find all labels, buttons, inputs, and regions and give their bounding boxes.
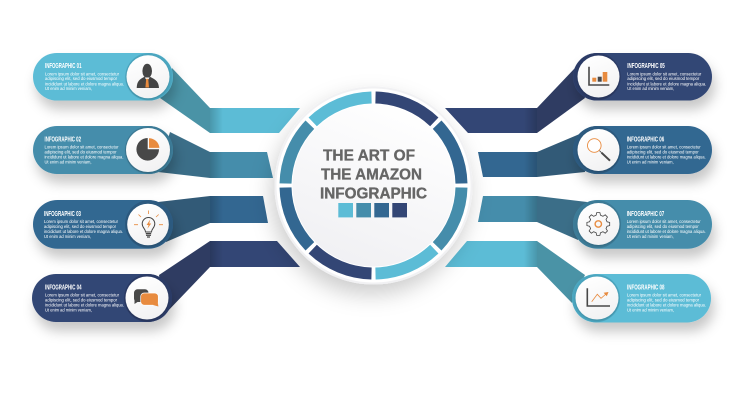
body text 08: incididunt ut labore et dolore magna aliqua. [627,303,706,309]
colour squares [338,203,407,217]
panel: infographic 07 [573,200,712,249]
icon: gear [573,200,621,248]
body text 08: Lorem ipsum dolor sit amet, consectetur [627,293,701,299]
title: THE AMAZON [321,166,422,184]
body text 03 [44,219,123,240]
heading 06: INFOGRAPHIC 06 [627,134,664,144]
body text 01 [45,71,124,92]
body text 05 [627,71,706,92]
body text 02: Ut enim ad minim veniam, [44,160,92,166]
body text 07: Lorem ipsum dolor sit amet, consectetur [627,219,701,225]
body text 04: incididunt ut labore et dolore magna aliqua. [45,303,124,309]
title [320,148,427,202]
body text 01: adipiscing elit, sed do eiusmod tempor [45,76,117,82]
body text 06 [627,144,706,166]
body text 02: incididunt ut labore et dolore magna aliqua. [44,154,124,160]
body text 03: Ut enim ad minim veniam, [44,234,91,240]
body text 07: Ut enim ad minim veniam, [627,234,674,240]
panel: infographic 08 [572,274,711,322]
body text 06: adipiscing elit, sed do eiusmod tempor [627,149,699,155]
connector: infographic 01 [160,68,300,133]
body text 04: Ut enim ad minim veniam, [45,308,92,314]
heading 03: INFOGRAPHIC 03 [44,209,81,218]
icon: line chart [572,274,620,322]
body text 07 [627,219,706,240]
body text 05: Lorem ipsum dolor sit amet, consectetur [627,71,702,77]
body text 01: Lorem ipsum dolor sit amet, consectetur [45,71,119,77]
connector: infographic 04 [159,241,300,314]
panel: infographic 05 [573,53,712,100]
panel: infographic 02 [33,126,173,174]
connector: infographic 07 [478,196,587,240]
icon: person [125,53,173,100]
panel: infographic 06 [573,126,712,174]
body text 08: adipiscing elit, sed do eiusmod tempor [627,297,699,303]
icon: bar chart [573,53,621,100]
body text 06: Ut enim ad minim veniam, [627,160,674,166]
central circle [249,61,498,310]
connector: infographic 06 [478,133,585,177]
heading 04: INFOGRAPHIC 04 [45,282,82,292]
connector: infographic 02 [158,132,273,178]
heading 07: INFOGRAPHIC 07 [627,209,664,218]
body text 07: adipiscing elit, sed do eiusmod tempor [627,224,699,230]
connector: infographic 03 [158,196,268,242]
body text 03: Lorem ipsum dolor sit amet, consectetur [44,219,118,225]
body text 04 [45,293,124,314]
body text 05: Ut enim ad minim veniam, [627,86,674,92]
body text 06: incididunt ut labore et dolore magna aliqua. [627,154,706,160]
body text 04: Lorem ipsum dolor sit amet, consectetur [45,293,119,299]
heading 05: INFOGRAPHIC 05 [627,61,665,70]
connector: infographic 08 [445,241,585,303]
connector: infographic 05 [445,68,585,133]
title: THE ART OF [323,148,415,164]
body text 01: Ut enim ad minim veniam, [45,86,92,92]
body text 08: Ut enim ad minim veniam, [627,308,674,314]
heading 01: INFOGRAPHIC 01 [45,61,82,70]
title: INFOGRAPHIC [320,186,427,202]
body text 02 [44,144,124,166]
heading 02: INFOGRAPHIC 02 [44,134,81,144]
panel: infographic 01 [33,53,173,100]
body text 05: adipiscing elit, sed do eiusmod tempor [627,76,700,82]
panel: infographic 04 [32,274,172,322]
body text 03: adipiscing elit, sed do eiusmod tempor [44,224,116,230]
body text 03: incididunt ut labore et dolore magna aliqua. [44,229,123,235]
segmented ring [249,61,498,310]
body text 07: incididunt ut labore et dolore magna aliqua. [627,229,706,235]
icon: speech bubbles [124,274,172,322]
body text 02: Lorem ipsum dolor sit amet, consectetur [44,144,119,150]
body text 01: incididunt ut labore et dolore magna aliqua. [45,81,124,87]
body text 04: adipiscing elit, sed do eiusmod tempor [45,297,117,303]
heading 08: INFOGRAPHIC 08 [627,282,664,292]
body text 05: incididunt ut labore et dolore magna aliqua. [627,81,706,87]
icon: magnifier [573,126,621,174]
icon: pie chart [125,126,173,174]
body text 02: adipiscing elit, sed do eiusmod tempor [44,149,117,155]
body text 06: Lorem ipsum dolor sit amet, consectetur [627,144,701,150]
body text 08 [627,293,706,314]
panel: infographic 03 [33,200,173,249]
icon: light bulb [125,200,173,248]
